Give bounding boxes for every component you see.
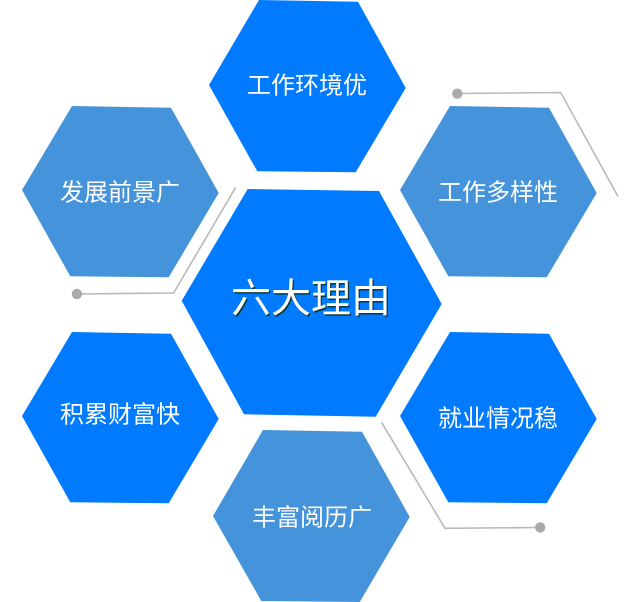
center hexagon: 六大理由: 六大理由 — [232, 278, 392, 322]
center hexagon: 六大理由 — [182, 189, 442, 417]
hexagon: 就业情况稳 — [400, 332, 597, 503]
hexagon: 发展前景广 — [22, 106, 219, 277]
connector: bottom right — [382, 423, 545, 533]
connector: left — [72, 187, 236, 299]
center hexagon: 六大理由: 六大理由 — [231, 277, 391, 321]
hexagon: 工作环境优 — [209, 0, 406, 172]
hexagon: 工作多样性 — [400, 106, 597, 277]
hexagon: 丰富阅历广 — [213, 430, 410, 602]
hexagon: 工作多样性: 工作多样性 — [438, 180, 558, 206]
hexagon: 积累财富快: 积累财富快 — [60, 402, 180, 428]
hexagon: 发展前景广: 发展前景广 — [60, 180, 180, 206]
hexagon: 工作环境优: 工作环境优 — [247, 72, 367, 100]
hexagon: 丰富阅历广: 丰富阅历广 — [252, 504, 372, 532]
hexagon: 就业情况稳: 就业情况稳 — [438, 406, 558, 432]
connector: top right — [452, 88, 618, 196]
hexagon: 积累财富快 — [22, 332, 219, 503]
